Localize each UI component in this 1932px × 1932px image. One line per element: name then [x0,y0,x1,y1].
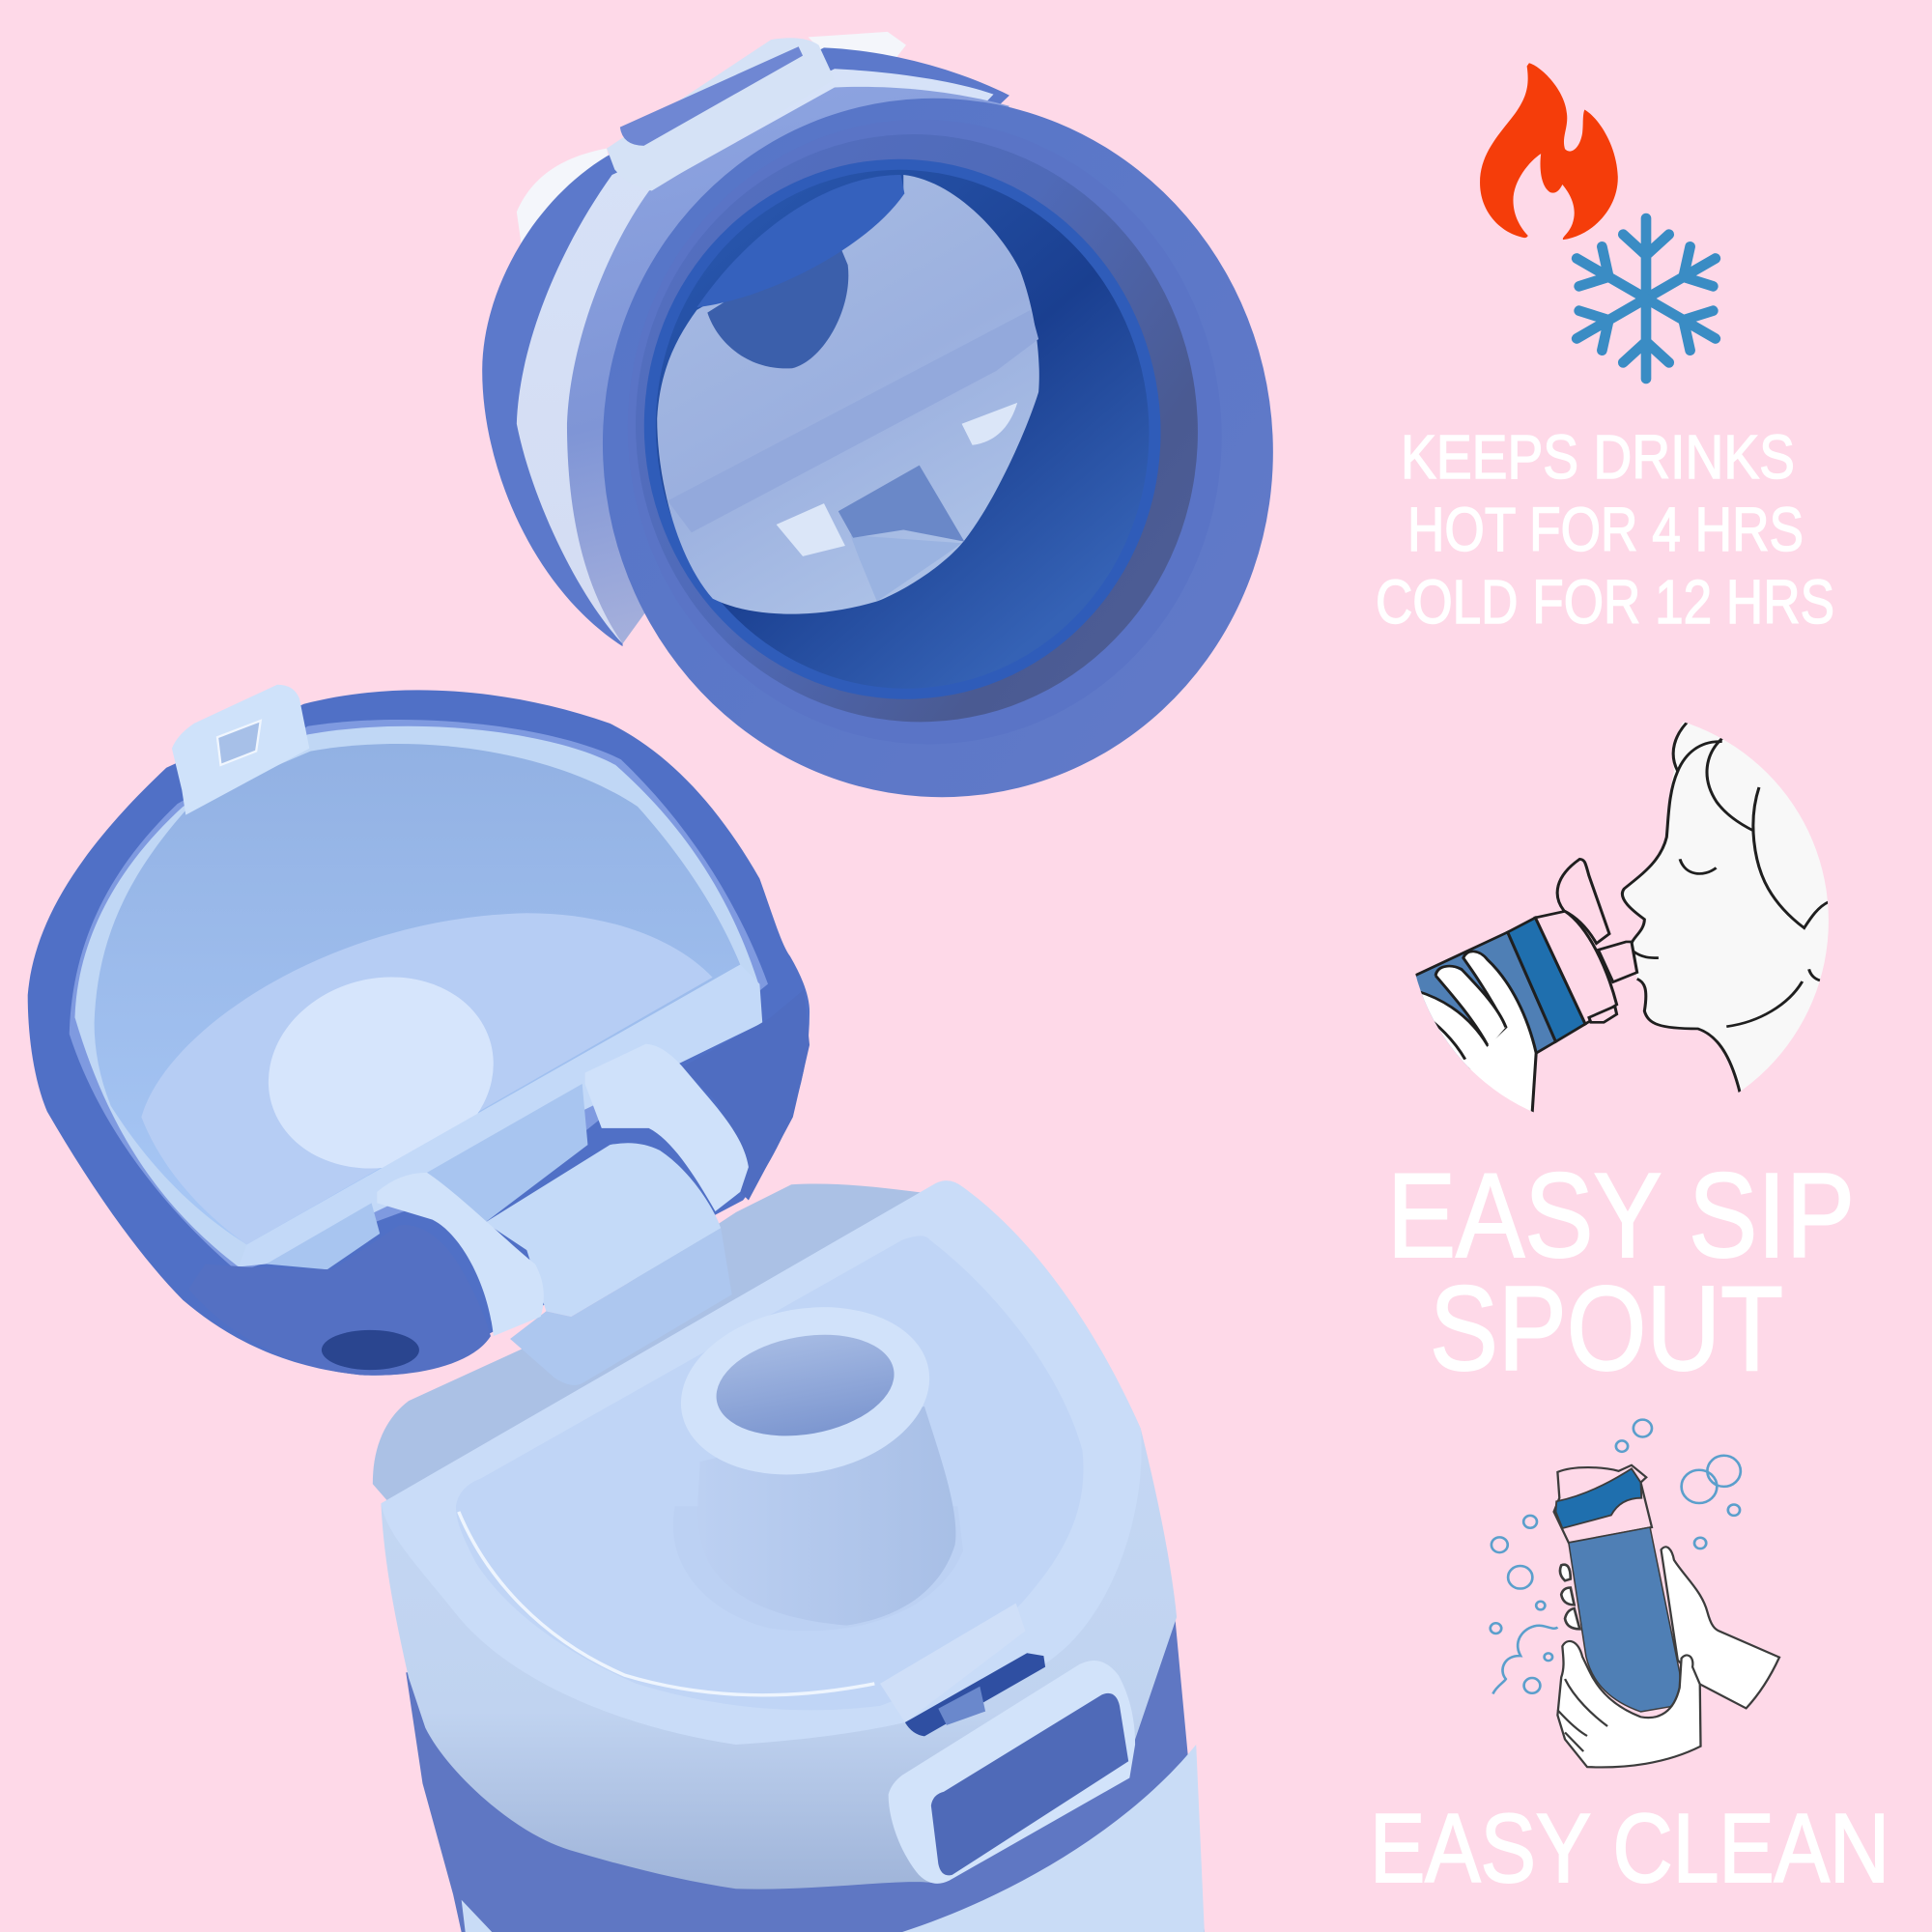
cap side [381,1180,1177,1889]
blue nose [188,1225,491,1376]
hand fingers [1420,951,1538,1113]
spout rim [668,1289,943,1493]
photo: open flip lid [28,685,810,1385]
heading: easy sip spout: SPOUT [1430,1263,1783,1396]
bottle body band [406,1606,1205,1932]
top lip [381,1180,1142,1745]
finger lines [1557,1679,1607,1751]
middle finger [1435,967,1506,1046]
bottle band [1555,1468,1641,1528]
bottle body [1569,1527,1680,1712]
hinge barrel top [485,1143,721,1317]
heading: easy sip spout [1387,1150,1855,1396]
hinge base plate [373,1184,957,1506]
right hand [1662,1547,1779,1708]
highlights [777,403,1017,556]
socket lower wall [850,535,962,602]
hair lines [1678,736,1830,1027]
bubbles [1491,1420,1741,1693]
latch button [620,46,803,146]
recess left [267,1203,380,1269]
icon: hands washing bottle [1491,1420,1779,1767]
screw hole [322,1330,419,1370]
washed bottle [1554,1465,1652,1543]
bowl rim [74,726,758,1266]
latch slot tab [880,1604,1025,1722]
bowl interior [95,744,740,1244]
light body section [462,1745,1205,1932]
heading: easy sip spout: EASY SIP [1387,1150,1855,1283]
lid outer shell [28,690,810,1376]
latch clip [607,38,835,190]
right hinge clip [585,1044,749,1211]
photo: bottle cap with spout [381,1180,1177,1889]
icon: flame [1480,63,1618,240]
photo: detached bottle lid insert [482,32,1319,840]
right hinge wing [682,989,810,1201]
diagonal groove [668,310,1038,532]
photo: bottle body and hinge base [373,1184,1205,1932]
spout [1589,942,1637,1022]
dome step [456,1236,1084,1710]
blue seal ring [610,126,1196,732]
interior moulding [657,175,1039,614]
gap shadow [70,720,768,1272]
recess centre [427,1084,587,1222]
lid tab [172,685,309,815]
flap [696,175,904,307]
hinge barrel front [510,1228,732,1385]
text: keeps drinks [1376,422,1834,637]
glass ring [598,98,1236,758]
left hinge clip [377,1173,544,1336]
inner rim step [587,81,1262,782]
rear flange [482,47,1009,646]
face fill [1624,723,1829,1092]
front wall top edge [239,965,762,1266]
light band [517,69,993,643]
left fingers [1560,1565,1579,1629]
bowl floor [141,913,713,1244]
text: keeps drinks: KEEPS DRINKS [1401,422,1795,492]
bottle stripes [1415,930,1557,1069]
text: keeps drinks: COLD FOR 12 HRS [1376,567,1834,637]
icon: person sipping from bottle [1415,723,1829,1113]
latch slider [938,1687,985,1725]
spout base [673,1506,963,1631]
periwinkle skirt [567,87,1009,643]
latch slot [905,1653,1045,1736]
bottle neck [1535,911,1617,1024]
eye and lips [1634,859,1717,958]
socket inner [838,466,964,542]
latch housing [889,1661,1135,1884]
tab slot [217,721,261,765]
white cap behind [517,32,906,249]
inner well [622,138,1182,721]
face outline [1622,719,1740,1093]
finger line [1434,964,1507,1061]
spout opening [708,1321,902,1449]
left hand [1557,1641,1701,1767]
icon: snowflake [1565,218,1727,379]
round boss [246,952,515,1193]
latch button [931,1693,1128,1875]
dome edge highlight [459,1512,874,1695]
bottle flip cap [1557,859,1609,944]
round recess [707,233,848,368]
spout stem [697,1406,955,1626]
outer rim [557,55,1319,840]
text: keeps drinks: HOT FOR 4 HRS [1407,495,1804,564]
